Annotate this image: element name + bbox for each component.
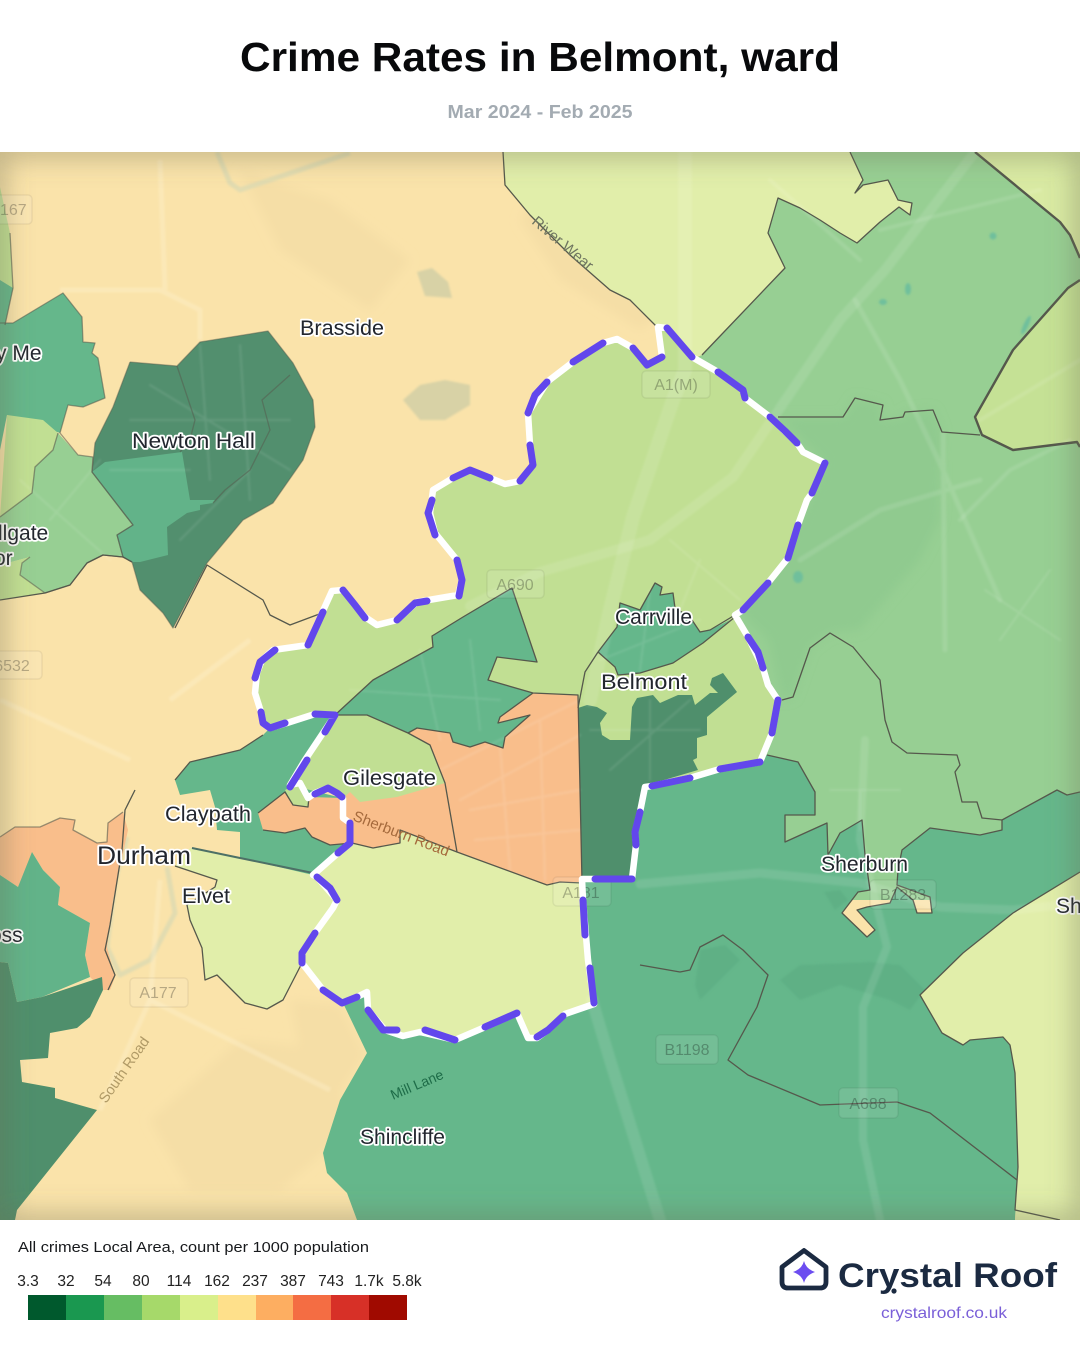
icon: Crystal Roof logo house <box>782 1250 826 1288</box>
legend: colour scale: 32 <box>57 1273 75 1290</box>
road shields: B1198 <box>664 1042 710 1059</box>
legend: colour scale: 80 <box>132 1273 150 1290</box>
region: Durham orange <box>0 812 128 990</box>
place labels: Sherburn <box>821 853 908 876</box>
region: west strip green <box>0 280 13 325</box>
region: south-east yellow <box>920 872 1080 1220</box>
region: Newton Hall light part <box>92 452 215 562</box>
ponds <box>793 232 1032 583</box>
road shields: A181 <box>562 885 600 902</box>
region: north light yellow-green <box>503 152 912 357</box>
patch: darker mid green <box>740 398 942 700</box>
region: west green <box>0 293 105 450</box>
region: Claypath-Sherburn orange <box>258 783 457 852</box>
place labels: Belmont <box>601 671 687 694</box>
region: south of Sherburn Road <box>302 830 594 1040</box>
legend: colour scale <box>17 1273 422 1320</box>
place labels: Shincliffe <box>360 1126 445 1149</box>
legend: colour scale: 237 <box>242 1273 268 1290</box>
ward boundary lines <box>0 152 1080 1220</box>
region: central green <box>335 588 537 748</box>
region: east light green <box>975 280 1080 450</box>
website: crystalroof.co.uk <box>881 1305 1008 1322</box>
legend: colour scale: 387 <box>280 1273 306 1290</box>
region: Belmont dark green <box>578 673 737 878</box>
region: north-east corner <box>975 152 1080 258</box>
place labels: Gilesgate <box>343 767 436 790</box>
legend title: All crimes Local Area, count per 1000 population <box>18 1240 369 1256</box>
road shields: A688 <box>849 1096 887 1113</box>
legend: colour scale: 743 <box>318 1273 344 1290</box>
place labels: Brasside <box>300 317 384 340</box>
place labels <box>0 317 1080 1149</box>
road shields <box>0 195 936 1118</box>
place labels: Newton Hall <box>132 430 255 453</box>
ward: Belmont boundary fill <box>258 331 820 882</box>
place labels: Carrville <box>615 606 692 629</box>
region: Carrville green <box>598 583 730 675</box>
place labels: Durham <box>97 842 191 870</box>
street labels <box>96 213 597 1106</box>
region: west strip light <box>0 188 13 288</box>
road shields: A177 <box>139 985 177 1002</box>
region: east mid green <box>690 152 1080 900</box>
region: south-west dark green <box>0 962 103 1220</box>
region: south-west green <box>0 852 90 1002</box>
logo wordmark: Crystal Roof <box>838 1257 1058 1295</box>
legend: colour scale: 1.7k <box>354 1273 384 1290</box>
legend: colour scale: 54 <box>94 1273 112 1290</box>
region: south green <box>323 755 1080 1220</box>
street labels: River Wear <box>528 213 597 274</box>
place labels: Elvet <box>182 885 230 908</box>
region: Framwellgate lower light <box>0 557 45 600</box>
region: Newton Hall dark green <box>92 331 315 628</box>
road shields: A1(M) <box>654 377 698 394</box>
region: Framwell west light <box>0 415 58 517</box>
region: Framwellgate mid green <box>0 433 133 593</box>
region: Gilesgate central orange <box>408 693 582 885</box>
legend: colour scale: 162 <box>204 1273 230 1290</box>
region: Claypath green <box>175 714 350 875</box>
street labels: South Road <box>96 1034 153 1106</box>
road shields: B1283 <box>880 887 926 904</box>
region: Elvet <box>175 848 337 1009</box>
patches: darker south green <box>695 890 925 1010</box>
roads <box>20 152 1080 1220</box>
road shields: A690 <box>496 577 534 594</box>
place labels: Claypath <box>165 803 251 826</box>
title: Crime Rates in Belmont, ward <box>240 34 840 80</box>
legend: colour scale: 114 <box>167 1273 192 1290</box>
street labels: Mill Lane <box>388 1066 446 1103</box>
ward outline: white with purple dashes <box>255 327 825 1040</box>
street labels: Sherburn Road <box>351 808 452 860</box>
region: Gilesgate west sliver <box>285 786 308 806</box>
subtitle: date range: Mar 2024 - Feb 2025 <box>448 102 632 122</box>
legend: colour scale: 3.3 <box>17 1273 39 1290</box>
legend: colour scale: 5.8k <box>392 1273 422 1290</box>
